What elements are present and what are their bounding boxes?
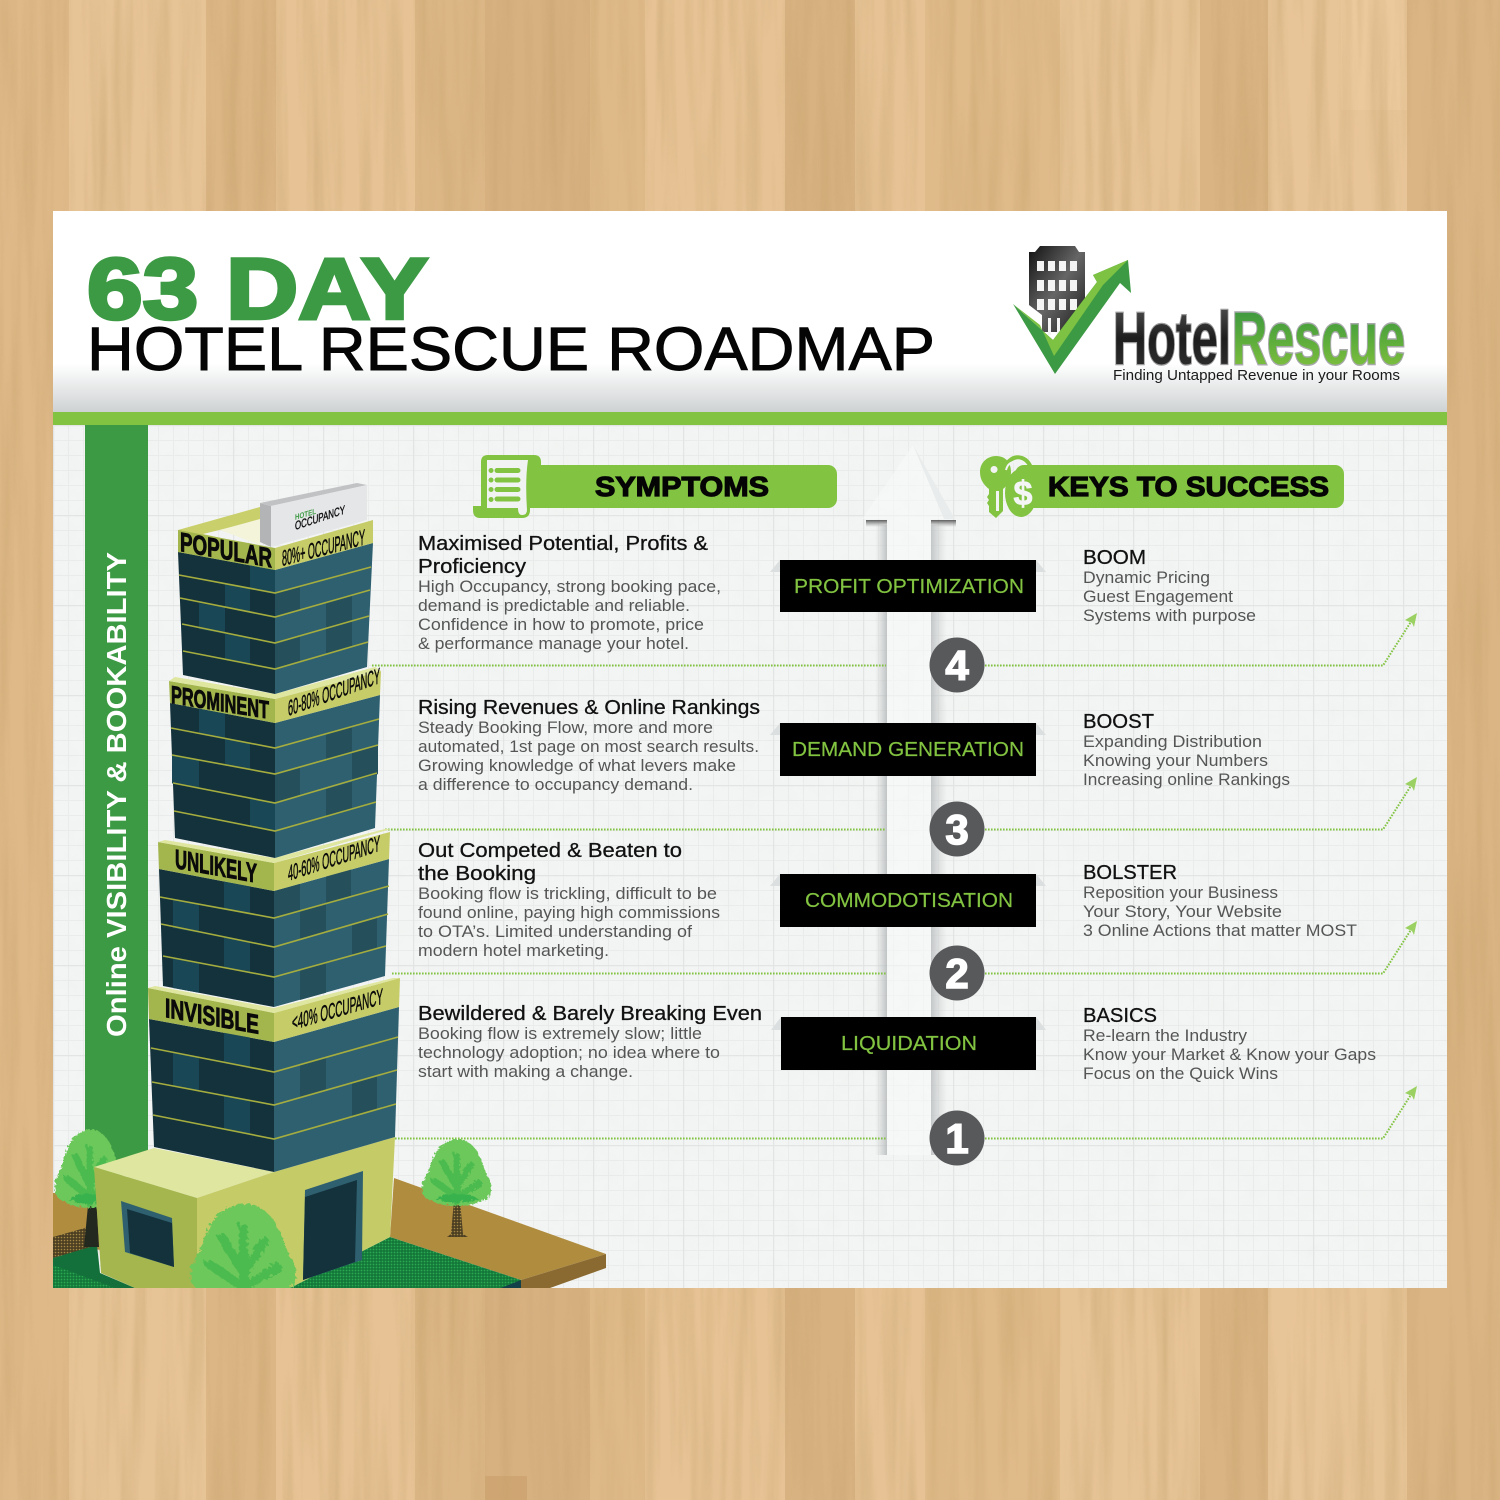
key block: boost: Increasing online Rankings <box>1083 771 1290 789</box>
tree: front <box>189 1202 294 1298</box>
symptom block: invisible: technology adoption; no idea where to <box>418 1044 720 1062</box>
band: popular: POPULAR <box>180 526 272 574</box>
central upward arrow <box>862 445 956 1155</box>
band: unlikely: UNLIKELY <box>175 843 257 889</box>
symptom block: unlikely: modern hotel marketing. <box>418 942 609 960</box>
key block: basics: Focus on the Quick Wins <box>1083 1065 1278 1083</box>
band: unlikely <box>158 829 391 891</box>
dotted connector: level 1 left <box>395 1138 886 1140</box>
tower floor: unlikely <box>158 829 391 1007</box>
key block: bolster <box>1083 862 1357 940</box>
number badge 1: 1 <box>945 1115 969 1162</box>
key block: boom: Dynamic Pricing <box>1083 569 1210 587</box>
keys to success heading <box>980 456 1344 518</box>
symptom block: unlikely: the Booking <box>418 863 536 885</box>
key block: boom: BOOM <box>1083 547 1146 569</box>
symptom block: popular: Proficiency <box>418 556 526 578</box>
icon: scroll list <box>473 455 541 518</box>
band: prominent: PROMINENT <box>171 681 269 725</box>
rooftop <box>178 507 275 570</box>
stage box: commodotisation: COMMODOTISATION <box>805 890 1013 912</box>
number badge 1 <box>930 1110 984 1166</box>
rooftop sign: hotel occupancy: HOTEL <box>295 507 316 522</box>
symptom block: popular: demand is predictable and reliable. <box>418 597 690 615</box>
symptom block: popular: Confidence in how to promote, price <box>418 616 704 634</box>
green divider strip <box>53 412 1447 425</box>
number badge 2: 2 <box>945 950 969 997</box>
stage box: profit optimization: PROFIT OPTIMIZATION <box>794 576 1024 598</box>
symptom block: popular: Maximised Potential, Profits & <box>418 533 709 555</box>
number badge 3 <box>930 802 984 856</box>
arrow connector: level 2 right <box>985 921 1417 974</box>
arrow connector: level 1 right <box>985 1086 1417 1138</box>
key block: boom <box>1083 547 1256 625</box>
symptom block: prominent: Steady Booking Flow, more and more <box>418 719 713 737</box>
symptom block: prominent: Rising Revenues & Online Rankings <box>418 697 760 719</box>
key block: bolster: Reposition your Business <box>1083 884 1278 902</box>
key block: boost: BOOST <box>1083 711 1154 733</box>
band: prominent <box>169 663 381 725</box>
symptoms heading: SYMPTOMS <box>595 471 769 502</box>
symptom block: unlikely: found online, paying high commissions <box>418 904 720 922</box>
symptom block: unlikely: to OTA’s. Limited understanding of <box>418 923 692 941</box>
key block: basics: Know your Market & Know your Gaps <box>1083 1046 1376 1064</box>
symptom block: prominent <box>418 697 760 794</box>
header band <box>53 211 1447 412</box>
tree: right <box>421 1138 490 1237</box>
tree: back left <box>54 1128 123 1247</box>
key block: boost: Knowing your Numbers <box>1083 752 1268 770</box>
text: 40-60% OCCUPANCY <box>288 831 380 886</box>
symptom block: unlikely: Booking flow is trickling, difficult to be <box>418 885 717 903</box>
wordmark: Rescue <box>1232 297 1405 380</box>
symptom block: prominent: Growing knowledge of what levers make <box>418 757 736 775</box>
rooftop sign: hotel occupancy <box>260 483 367 547</box>
symptom block: popular <box>418 533 721 653</box>
band: invisible: <40% OCCUPANCY <box>292 984 383 1035</box>
vertical bar: online visibility and bookability: Online VISIBILITY & BOOKABILITY <box>101 552 132 1037</box>
stage box: demand generation <box>770 723 1046 776</box>
number badge 3: 3 <box>945 806 969 853</box>
band: invisible: INVISIBLE <box>165 992 259 1040</box>
symptom block: invisible: Booking flow is extremely slow; little <box>418 1025 702 1043</box>
symptom block: popular: High Occupancy, strong booking pace, <box>418 578 721 596</box>
tower floor: invisible <box>148 978 400 1172</box>
symptom block: prominent: a difference to occupancy demand. <box>418 776 693 794</box>
key block: boost <box>1083 711 1290 789</box>
symptom block: invisible: start with making a change. <box>418 1063 633 1081</box>
vertical bar: online visibility and bookability <box>85 425 148 1175</box>
number badge 2 <box>930 946 984 1000</box>
band: popular <box>178 520 373 574</box>
band: invisible <box>148 978 400 1042</box>
text: 60-80% OCCUPANCY <box>288 663 380 721</box>
stage box: demand generation: DEMAND GENERATION <box>792 739 1024 761</box>
stage box: commodotisation <box>770 874 1046 927</box>
tagline: Finding Untapped Revenue in your Rooms <box>1113 368 1400 384</box>
title line: hotel rescue roadmap: HOTEL RESCUE ROADMAP <box>87 315 935 383</box>
arrow connector: level 4 right <box>985 613 1417 666</box>
key block: basics <box>1083 1005 1376 1083</box>
icon: green check arrow <box>1013 260 1131 374</box>
hotel illustration <box>53 1128 606 1298</box>
title <box>87 242 935 383</box>
key block: boom: Guest Engagement <box>1083 588 1233 606</box>
tower floor: popular <box>178 483 373 694</box>
text: 80%+ OCCUPANCY <box>282 525 365 571</box>
key block: basics: Re-learn the Industry <box>1083 1027 1248 1045</box>
key block: boost: Expanding Distribution <box>1083 733 1262 751</box>
tower base block <box>94 1137 395 1288</box>
symptom block: invisible <box>418 1003 762 1081</box>
dotted connector: level 2 left <box>392 972 886 974</box>
wordmark: Hotel <box>1113 297 1231 380</box>
base door <box>303 1171 363 1280</box>
icon: building <box>1029 246 1085 335</box>
key block: boom: Systems with purpose <box>1083 607 1256 625</box>
dotted connector: level 3 left <box>385 828 886 830</box>
keys to success heading: KEYS TO SUCCESS <box>1048 471 1329 502</box>
logo: Hotel Rescue <box>1013 246 1405 384</box>
symptom block: unlikely <box>418 840 720 960</box>
symptom block: invisible: Bewildered & Barely Breaking Even <box>418 1003 762 1025</box>
title line: 63 DAY: 63 DAY <box>87 242 428 338</box>
ground: right lawn and path <box>290 1178 606 1288</box>
symptom block: popular: & performance manage your hotel. <box>418 635 689 653</box>
key block: bolster: 3 Online Actions that matter MOST <box>1083 922 1357 940</box>
panel: infographic sheet <box>53 211 1447 1288</box>
key block: bolster: BOLSTER <box>1083 862 1177 884</box>
tower floor: prominent <box>169 663 381 858</box>
symptom block: prominent: automated, 1st page on most search results. <box>418 738 759 756</box>
key block: basics: BASICS <box>1083 1005 1157 1027</box>
stage box: liquidation: LIQUIDATION <box>841 1033 977 1055</box>
number badge 4 <box>930 638 984 692</box>
arrow connector: level 3 right <box>985 777 1417 830</box>
keys pill <box>1015 465 1344 508</box>
symptoms pill <box>520 465 837 508</box>
icon: keys with dollar: $ <box>1014 475 1033 513</box>
key block: bolster: Your Story, Your Website <box>1083 903 1282 921</box>
stage box: profit optimization <box>770 560 1046 612</box>
stage box: liquidation <box>771 1017 1046 1070</box>
wordmark <box>1113 297 1405 380</box>
number badge 4: 4 <box>945 642 969 689</box>
ground: left lawn and path <box>53 1193 135 1288</box>
base window <box>121 1201 174 1267</box>
rooftop sign: hotel occupancy: OCCUPANCY <box>295 503 345 533</box>
dotted connector: level 4 left <box>372 664 886 666</box>
symptom block: unlikely: Out Competed & Beaten to <box>418 840 682 862</box>
icon: keys with dollar <box>980 456 1037 518</box>
symptoms heading <box>473 455 837 518</box>
